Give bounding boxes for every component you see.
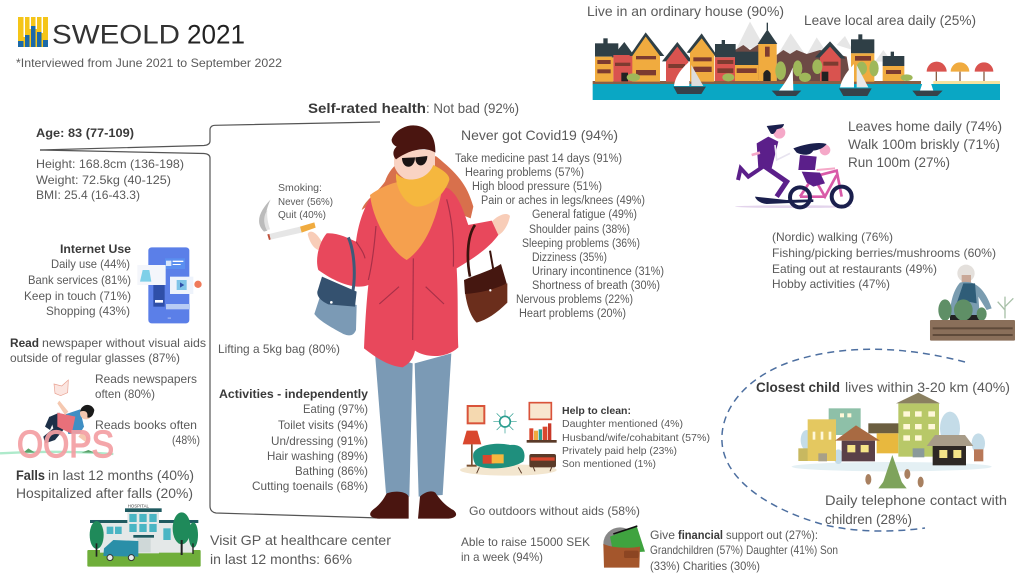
closest child: Closest child <box>756 379 840 395</box>
illustration: hospital: HOSPITAL <box>128 504 149 509</box>
coat <box>317 187 498 367</box>
reading stats: (48%) <box>172 433 200 447</box>
internet use: Keep in touch (71%) <box>24 289 131 303</box>
reading stats: Reads books often <box>95 418 197 432</box>
health conditions list: Sleeping problems (36%) <box>522 238 640 250</box>
help to clean: Daughter mentioned (4%) <box>562 418 683 430</box>
help to clean: Privately paid help (23%) <box>562 445 677 457</box>
health conditions list: General fatigue (49%) <box>532 209 637 221</box>
covid: Never got Covid19 (94%) <box>461 127 618 143</box>
activities independently: Activities - independently <box>219 387 368 401</box>
health conditions list: Pain or aches in legs/knees (49%) <box>481 195 645 207</box>
go outdoors: Go outdoors without aids (58%) <box>469 504 640 518</box>
scarf lower <box>370 181 442 260</box>
age heading: Age: 83 (77-109) <box>36 128 134 140</box>
falls stats: Hospitalized after falls (20%) <box>16 485 193 501</box>
mobility stats: Run 100m (27%) <box>848 154 950 170</box>
logo year: 2021 <box>187 20 245 50</box>
raise money: Able to raise 15000 SEK <box>461 535 590 549</box>
financial support <box>650 528 838 573</box>
read newspaper without visual aids: outside of regular glasses (87%) <box>10 351 180 365</box>
smoking stats: Quit (40%) <box>278 209 326 221</box>
sunglasses <box>402 156 427 167</box>
body measures: Weight: 72.5kg (40-125) <box>36 173 171 187</box>
reading stats <box>95 372 200 447</box>
read newspaper without visual aids <box>10 336 206 365</box>
financial support: Give <box>650 528 675 542</box>
activities independently <box>219 387 368 493</box>
GP visit: in last 12 months: 66% <box>210 551 352 567</box>
illustration: village <box>792 393 992 488</box>
internet use: Internet Use <box>60 242 131 256</box>
shoes <box>370 491 456 519</box>
coat seams <box>356 199 454 340</box>
leisure activities: (Nordic) walking (76%) <box>772 230 893 244</box>
GP visit: Visit GP at healthcare center <box>210 532 391 548</box>
housing label: Live in an ordinary house (90%) <box>587 3 784 19</box>
lifting bag: Lifting a 5kg bag (80%) <box>218 342 340 356</box>
bracket lines <box>40 122 380 518</box>
leisure activities: Fishing/picking berries/mushrooms (60%) <box>772 246 996 260</box>
mobility stats <box>848 118 1002 170</box>
help to clean: Son mentioned (1%) <box>562 458 656 470</box>
blue shoulder bag <box>314 237 357 335</box>
illustration: hospital <box>87 504 201 567</box>
left hand <box>308 232 322 250</box>
illustration: harbour town <box>593 22 1000 100</box>
right hand <box>492 214 510 236</box>
smoking stats: Smoking: <box>278 182 322 194</box>
help to clean: Husband/wife/cohabitant (57%) <box>562 432 710 444</box>
help to clean: Help to clean: <box>562 405 631 417</box>
activities independently: Hair washing (89%) <box>267 449 368 463</box>
activities independently: Eating (97%) <box>303 402 368 416</box>
internet use: Shopping (43%) <box>46 304 130 318</box>
person illustration <box>308 125 510 519</box>
illustration: runner and cyclist <box>735 124 852 208</box>
legs <box>375 353 451 497</box>
illustration: gardener <box>930 265 1015 341</box>
telephone contact: children (28%) <box>825 511 912 527</box>
health conditions list: Hearing problems (57%) <box>465 167 584 179</box>
reading stats: often (80%) <box>95 387 155 401</box>
scarf upper <box>396 165 449 207</box>
falls stats <box>16 467 194 501</box>
falls stats: Falls <box>16 467 45 483</box>
icon: bar logo <box>18 17 48 47</box>
dashed family ellipse <box>722 349 965 531</box>
health conditions list: High blood pressure (51%) <box>472 181 602 193</box>
internet use: Bank services (81%) <box>28 273 131 287</box>
smoking stats: Never (56%) <box>278 196 333 208</box>
health conditions list: Shoulder pains (38%) <box>529 224 630 236</box>
financial support: support out (27%): <box>726 528 818 542</box>
illustration: living room <box>460 403 557 476</box>
financial support: Grandchildren (57%) Daughter (41%) Son <box>650 543 838 557</box>
internet use: Daily use (44%) <box>51 257 130 271</box>
body measures: BMI: 25.4 (16-43.3) <box>36 188 140 202</box>
leisure activities: Eating out at restaurants (49%) <box>772 262 937 276</box>
self-rated health: Self-rated health <box>308 100 426 116</box>
internet use <box>24 242 131 318</box>
smoking stats <box>278 182 333 221</box>
body measures: Height: 168.8cm (136-198) <box>36 157 184 171</box>
body measures <box>36 157 184 202</box>
hair <box>362 154 473 218</box>
brown handbag <box>464 225 507 323</box>
health conditions list: Dizziness (35%) <box>532 252 607 264</box>
health conditions list <box>455 153 664 320</box>
activities independently: Un/dressing (91%) <box>271 434 368 448</box>
telephone contact <box>825 492 1007 527</box>
face <box>394 150 435 182</box>
falls stats: in last 12 months (40%) <box>48 467 194 483</box>
icon: wallet <box>603 526 645 568</box>
GP visit <box>210 532 391 567</box>
activities independently: Cutting toenails (68%) <box>252 479 368 493</box>
activities independently: Bathing (86%) <box>295 464 368 478</box>
read newspaper without visual aids: newspaper without visual aids <box>42 336 206 350</box>
reading stats: Reads newspapers <box>95 372 197 386</box>
logo wordmark: SWEOLD <box>52 20 180 50</box>
interview dates note: *Interviewed from June 2021 to September 2022 <box>16 56 282 70</box>
health conditions list: Take medicine past 14 days (91%) <box>455 153 622 165</box>
illustration: falling reader <box>0 380 113 454</box>
self-rated health: : Not bad (92%) <box>426 100 519 116</box>
raise money <box>461 535 590 564</box>
mobility stats: Leaves home daily (74%) <box>848 118 1002 134</box>
OOPS label: OOPS <box>17 424 114 466</box>
health conditions list: Nervous problems (22%) <box>516 294 633 306</box>
closest child: lives within 3-20 km (40%) <box>845 379 1010 395</box>
telephone contact: Daily telephone contact with <box>825 492 1007 508</box>
leisure activities <box>772 230 996 291</box>
logo: SWEOLD <box>18 17 245 50</box>
mobility stats: Walk 100m briskly (71%) <box>848 136 1000 152</box>
leisure activities: Hobby activities (47%) <box>772 277 890 291</box>
icon: cigarette with smoke <box>259 199 316 240</box>
health conditions list: Heart problems (20%) <box>519 308 626 320</box>
health conditions list: Shortness of breath (30%) <box>532 280 660 292</box>
read newspaper without visual aids: Read <box>10 336 39 350</box>
financial support: financial <box>678 528 723 542</box>
raise money: in a week (94%) <box>461 550 543 564</box>
help to clean <box>562 405 710 470</box>
health conditions list: Urinary incontinence (31%) <box>532 266 664 278</box>
local area label: Leave local area daily (25%) <box>804 12 976 28</box>
icon: smartphone <box>137 247 202 323</box>
hat <box>392 125 435 159</box>
activities independently: Toilet visits (94%) <box>278 418 368 432</box>
financial support: (33%) Charities (30%) <box>650 559 760 573</box>
